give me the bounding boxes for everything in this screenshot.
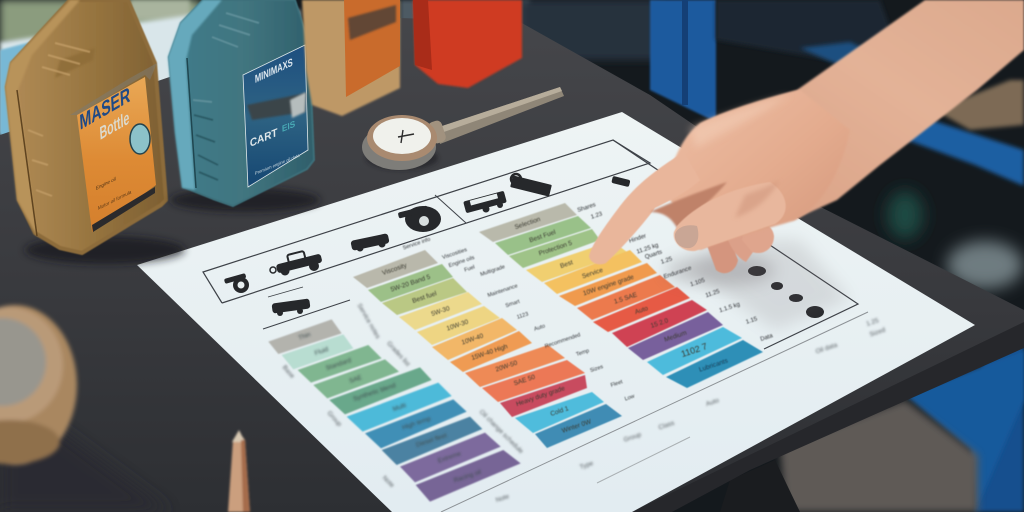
text list: between columns 2 and 3: Maintenance (487, 283, 519, 299)
label: orange product label: MASER (79, 83, 131, 135)
footer and side notes: Oil change schedule (478, 409, 525, 456)
text list: between columns 2 and 3: Auto (533, 323, 546, 333)
text list: right of column 3: 11.25 kg (636, 243, 659, 256)
band labels: column 3: Protection 5 (538, 240, 573, 257)
paper chart sheet (137, 112, 975, 512)
band labels: column 2: 10W-40 (461, 333, 485, 347)
band labels: column 3: Medium (664, 330, 688, 344)
footer and side notes: 1.25 (865, 317, 880, 328)
band labels: column 3: Lubricants (698, 357, 730, 374)
label: blue product label: Premium engine oil data (255, 152, 300, 176)
band labels: column 3: Service (581, 267, 604, 280)
footer and side notes: Class (658, 419, 676, 431)
text list: between columns 2 and 3: Viscosities (442, 247, 468, 261)
text list: right of column 3: Quarts (644, 249, 663, 261)
text list: between columns 2 and 3: 1123 (516, 311, 529, 321)
band labels: column 3: 1.5 SAE (613, 291, 639, 306)
label: engine photo (247, 93, 306, 120)
band labels: column 2: 20W-50 (495, 360, 519, 374)
band labels: column 3: Best (559, 259, 574, 270)
band labels: column 2: 10W-30 (446, 319, 470, 333)
text list: right of column 3: 1.25 (660, 256, 674, 266)
label: orange label (344, 0, 400, 97)
band labels: column 2: Cold 1 (550, 405, 570, 418)
pressure gauge tool (362, 87, 564, 170)
icon: small gauge top right (611, 176, 630, 187)
footer and side notes: Type (579, 460, 595, 471)
band labels: column 3: Auto (634, 305, 649, 316)
band labels: column 2: 5W-20 Band 5 (390, 274, 432, 294)
column 2: colour bands (353, 250, 622, 448)
icon: truck (463, 191, 507, 213)
text list: between columns 2 and 3: Service info (402, 237, 431, 251)
band labels: column 1: Synthetic blend (352, 382, 397, 403)
text list: between columns 2 and 3: Fuel (464, 264, 476, 274)
column 1: colour bands (268, 319, 521, 502)
text list: right of column 3: 1.105 (690, 278, 706, 288)
footer and side notes: Auto (705, 397, 720, 408)
band labels: column 1: Thin (297, 331, 312, 342)
band labels: column 1: Multi (392, 402, 407, 413)
band labels: column 2: Viscosity (381, 262, 408, 277)
footer and side notes: Note (495, 493, 510, 504)
text list: between columns 2 and 3: Low (624, 394, 635, 403)
footer and side notes: Oil data (815, 342, 839, 355)
footer and side notes: Grades list (385, 340, 411, 368)
label: orange product label (77, 77, 156, 232)
band labels: column 2: SAE 50 (513, 374, 536, 387)
band labels: column 2: Heavy duty grade (515, 385, 566, 408)
text list: between columns 2 and 3: Recommended (544, 332, 581, 350)
back of hand (664, 90, 850, 250)
icon: engine (398, 205, 441, 232)
band labels: column 2: 5W-30 (430, 305, 451, 318)
label: blue product label: EIS (282, 118, 295, 134)
pencil (228, 430, 250, 512)
text list: right of column 3: 1.23 (590, 211, 604, 221)
header icons (224, 174, 824, 318)
band labels: column 3: 10W engine grade (582, 274, 635, 297)
text list: right of column 3: Endurance (663, 265, 693, 281)
text list: right of column 3: 1.1.5 kg (719, 302, 741, 314)
bowl at left edge (0, 305, 77, 465)
text list: between columns 2 and 3 (402, 237, 635, 403)
bottle: teal oil bottle (168, 0, 320, 212)
label: orange product label: Motor oil formula (98, 189, 132, 212)
icon: motorcycle (224, 273, 249, 293)
column 3: colour bands (479, 203, 763, 388)
footer and side notes: Note (381, 475, 396, 490)
text list: between columns 2 and 3: Smart (505, 299, 521, 309)
icon: fuel can (510, 174, 552, 197)
band labels: column 2 (381, 262, 593, 435)
bottle: red bottle (413, 0, 522, 88)
finger shadow (650, 182, 727, 228)
band labels: column 2: 15W-40 High (471, 343, 509, 362)
thumbnail (675, 225, 698, 248)
bottle: tan oil bottle (5, 0, 185, 264)
band labels: column 1: Fluid (314, 346, 330, 357)
text list: right of column 3 (577, 202, 774, 343)
label: blue product label: MINIMAXS (255, 56, 293, 86)
pointing hand and arm (589, 0, 1024, 286)
band labels: column 1: High temp (401, 415, 432, 432)
text list: right of column 3: Shares (577, 202, 597, 214)
icon: car (350, 233, 390, 252)
text list: between columns 2 and 3: Temp (575, 348, 590, 358)
curled fingers (705, 223, 774, 273)
label: orange product label: Engine oil (96, 176, 116, 192)
text list: between columns 2 and 3: Multigrade (480, 264, 506, 278)
band labels: column 3 (514, 216, 730, 374)
thumb (674, 182, 786, 251)
band labels: column 3: Selection (514, 216, 542, 231)
icon: tractor (270, 251, 323, 276)
footer and side notes: Service notes (355, 302, 382, 341)
index finger (589, 152, 700, 264)
band labels: column 1: Standard (325, 357, 352, 372)
footer and side notes: Base (281, 364, 296, 380)
band labels: column 2: Best fuel (412, 290, 438, 305)
band labels: column 1: Diesel fleet (415, 432, 448, 449)
chart header frame (203, 140, 868, 512)
text list: between columns 2 and 3: Engine oils (448, 255, 476, 269)
band labels: column 3: 1102 7 (680, 341, 708, 359)
label: blue product label: CART (250, 126, 278, 150)
band labels: column 1 (297, 331, 482, 484)
text list: right of column 3: 11.25 (705, 289, 721, 299)
icon: dots column (748, 266, 824, 318)
label: blue product label (243, 45, 308, 187)
icon: round seal (130, 124, 150, 154)
band labels: column 2: Winter 0W (561, 418, 593, 435)
band labels: column 3: 15 2.0 (650, 317, 670, 330)
band labels: column 1: Extreme (437, 450, 462, 465)
label: orange product label: Bottle (99, 107, 130, 144)
footer and side notes: Group (325, 410, 343, 428)
icon: small car (271, 298, 311, 316)
band labels: column 3: Best Fuel (528, 229, 557, 244)
text list: right of column 3: Data (760, 333, 774, 343)
text list: between columns 2 and 3: Sizes (589, 364, 604, 374)
text list: between columns 2 and 3: Fleet (610, 379, 624, 389)
footer and side notes: Sized (869, 327, 887, 339)
gauge needle (398, 130, 414, 143)
footer and side notes (281, 302, 887, 504)
bottle: background tan bottle (302, 0, 400, 116)
band labels: column 1: Racing oil (453, 469, 482, 484)
band labels: column 1: SAE (348, 374, 363, 385)
footer and side notes: Group (623, 431, 643, 444)
text list: right of column 3: 1.15 (745, 316, 759, 326)
arm (700, 0, 1024, 220)
text list: right of column 3: Hinder (628, 233, 647, 245)
